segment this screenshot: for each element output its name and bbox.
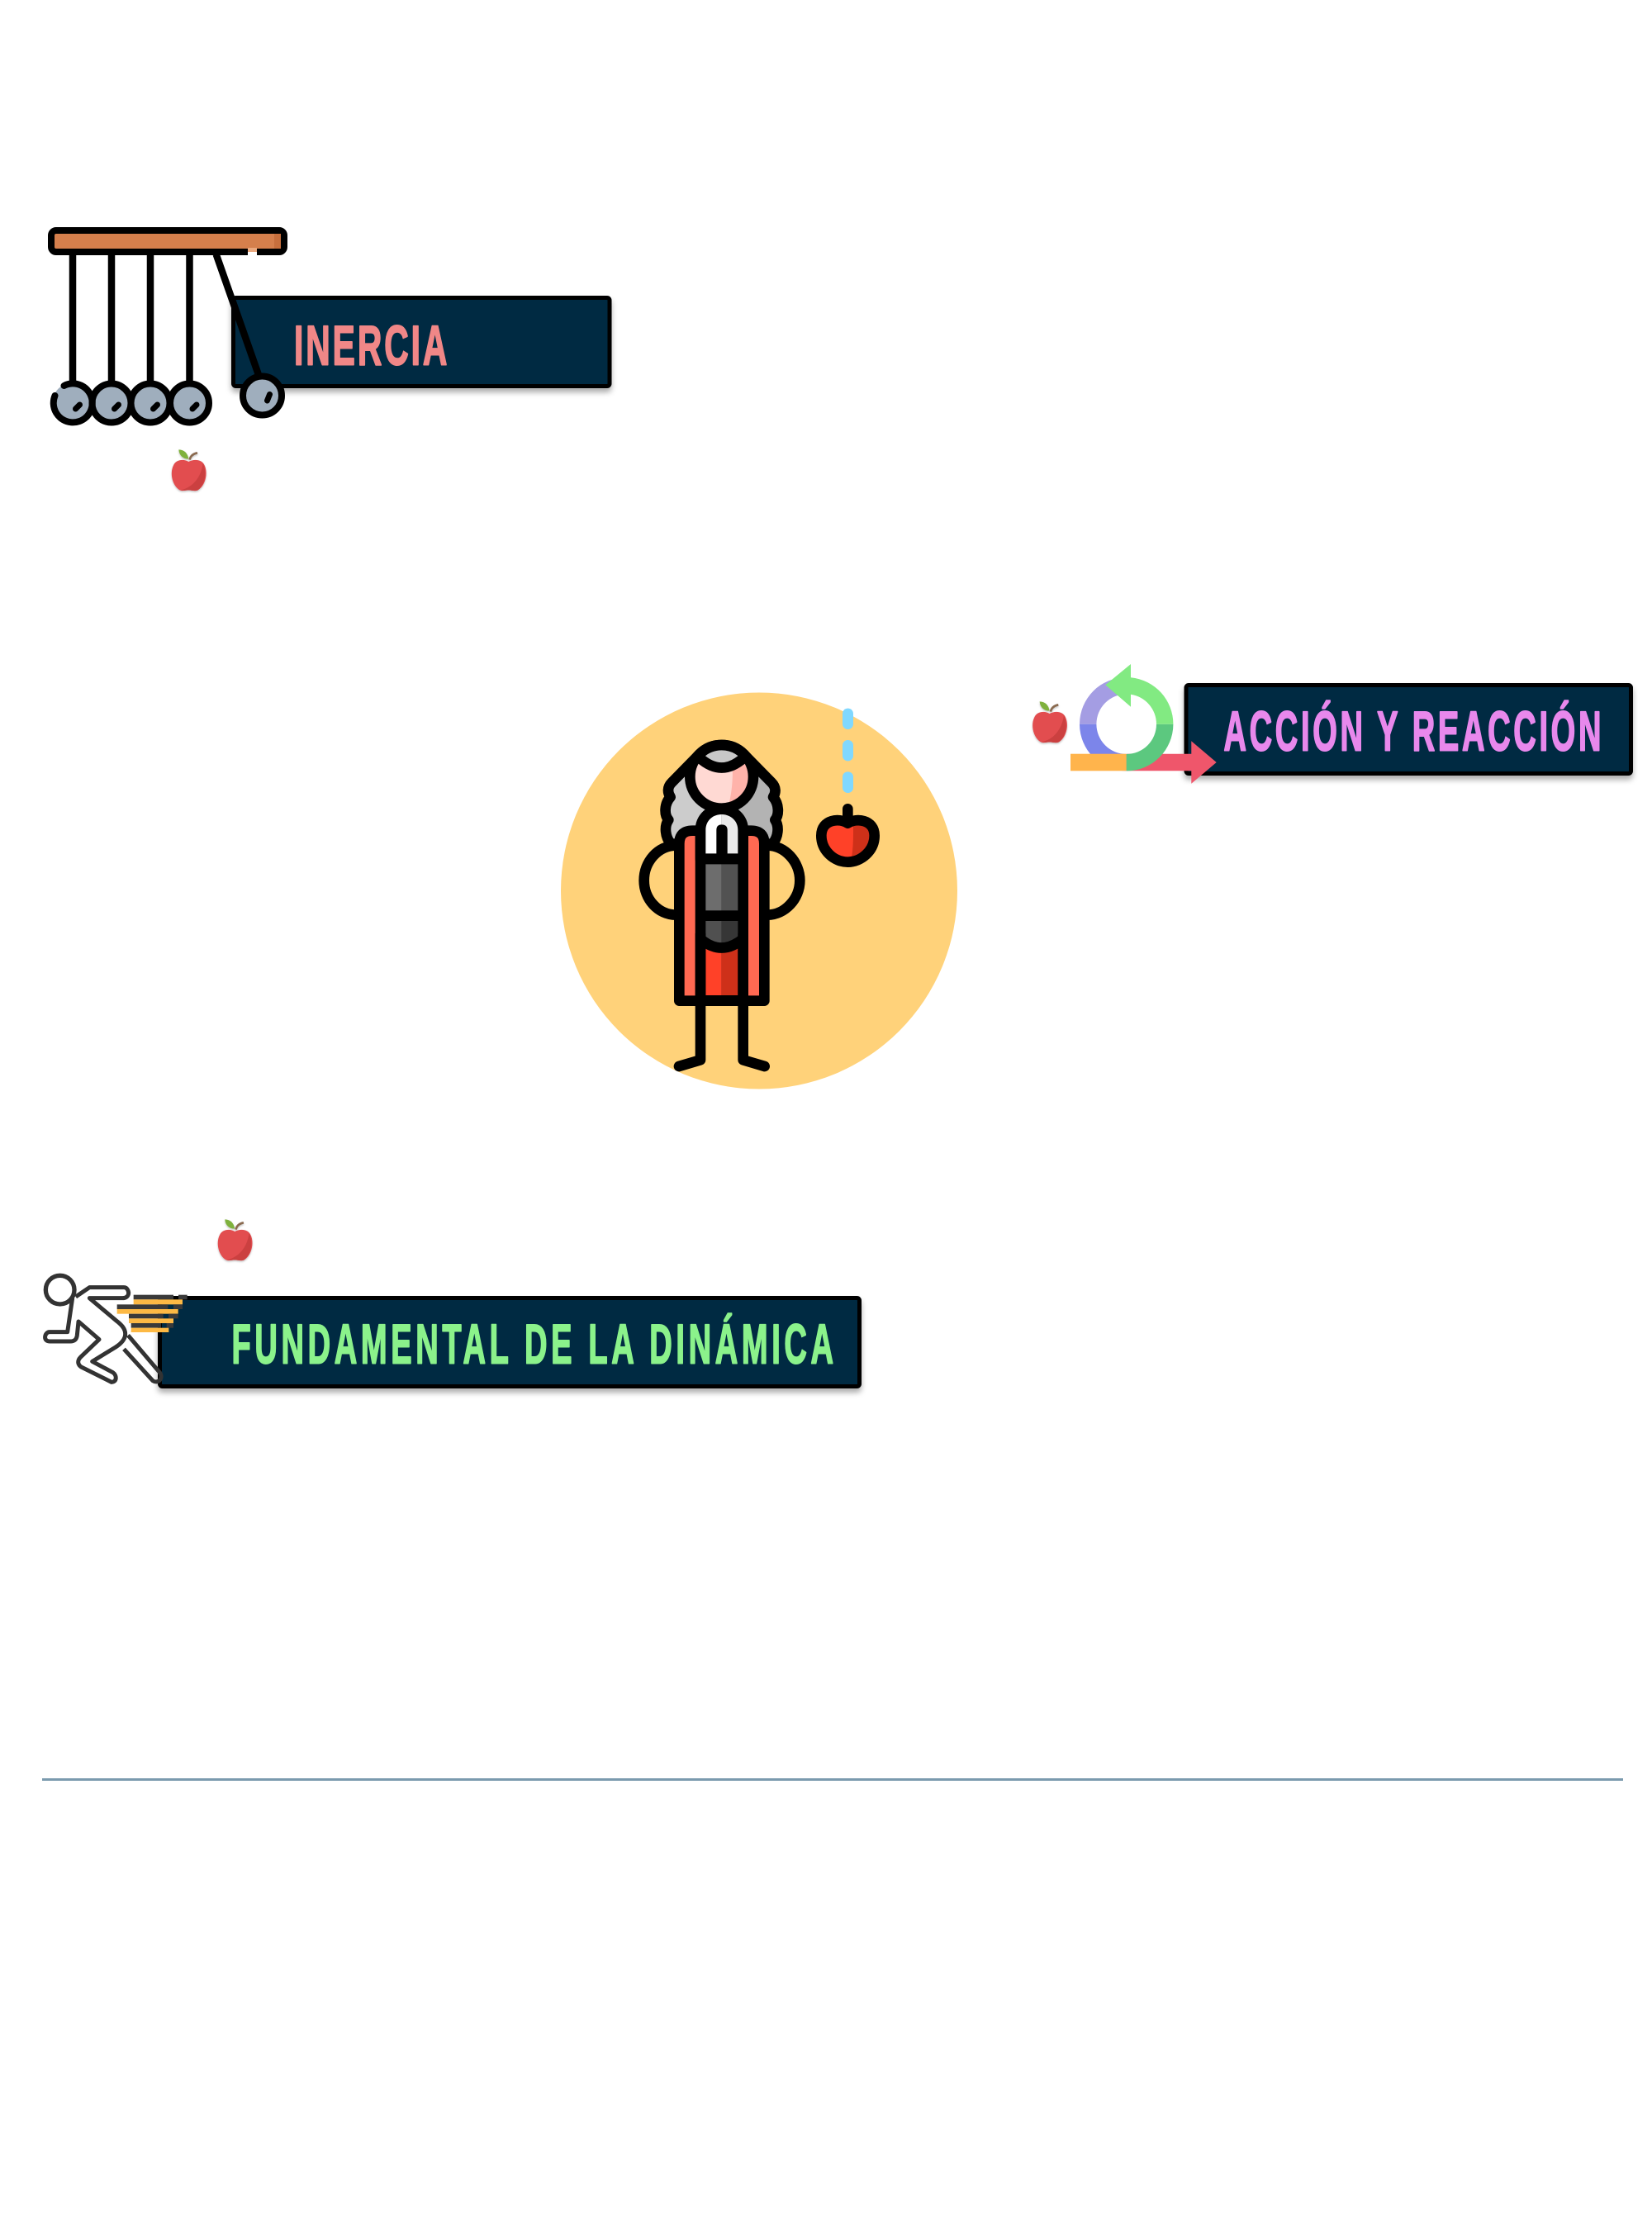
head: [690, 745, 754, 809]
heading: accion y reaccion: [1186, 686, 1631, 773]
icon: apple near inercia: [172, 449, 206, 491]
hair: [661, 743, 782, 845]
vest and shirt: [695, 832, 748, 1004]
icon: apple near accion y reaccion: [1032, 701, 1067, 743]
ring: blue section: [1080, 724, 1127, 771]
runner back leg: [124, 1336, 161, 1382]
falling dashed line: [843, 709, 853, 793]
falling apple: [821, 809, 876, 863]
cradle top bar: [51, 230, 284, 256]
collar: [700, 809, 743, 859]
label text: inercia: INERCIA: [294, 314, 447, 377]
icon: newton's cradle: [51, 230, 284, 423]
divider line: [42, 1778, 1623, 1781]
label box: accion y reaccion: [1186, 686, 1631, 773]
label text: accion y reaccion: ACCIÓN Y REACCIÓN: [1224, 700, 1601, 762]
icon: running person: [45, 1275, 188, 1382]
label box: fundamental: [160, 1298, 859, 1386]
ring: dark green section: [1127, 724, 1173, 771]
icon: apple near fundamental: [218, 1219, 253, 1260]
runner body: [45, 1288, 129, 1382]
yellow background circle: [561, 692, 957, 1089]
cradle balls: [53, 376, 282, 423]
icon: cycle arrow: [1070, 664, 1217, 784]
ring: light green section with arrowhead: [1105, 664, 1173, 724]
speed lines: [117, 1295, 188, 1332]
label box: inercia: [233, 297, 610, 387]
coat: [679, 831, 764, 1001]
newton figure: [644, 709, 876, 1066]
arms: [644, 846, 800, 915]
heading: fundamental de la dinamica: [160, 1298, 859, 1386]
runner head: [45, 1275, 74, 1304]
label text: fundamental: FUNDAMENTAL DE LA DINÁMICA: [231, 1312, 833, 1375]
cradle strings: [73, 254, 259, 382]
bar: orange base: [1070, 754, 1127, 771]
ring: purple sections: [1080, 677, 1127, 724]
legs: [679, 1006, 765, 1066]
arrow: pink forward: [1127, 741, 1217, 784]
illustration: newton with apple: [561, 692, 957, 1089]
heading: inercia: [233, 297, 610, 387]
